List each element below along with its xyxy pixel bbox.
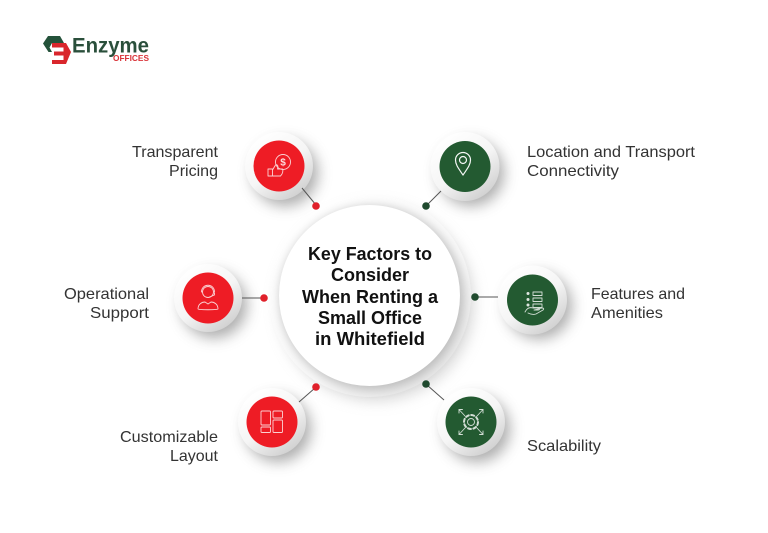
node: transparent pricing xyxy=(245,132,320,210)
icon: map pin xyxy=(456,152,470,175)
node: features and amenities xyxy=(471,266,572,339)
central heading xyxy=(302,244,439,349)
icon: support agent xyxy=(198,285,218,310)
label: scalability: Scalability xyxy=(527,438,601,455)
node: scalability xyxy=(422,380,510,462)
label: operational support: Operational xyxy=(64,286,149,303)
icon: layout grid xyxy=(261,411,282,432)
icon: dollar and thumbs up xyxy=(268,154,290,176)
label: features and amenities: Amenities xyxy=(591,305,663,322)
node: operational support xyxy=(174,264,268,338)
central heading: Small Office xyxy=(318,308,422,328)
logo subtitle: OFFICES xyxy=(113,53,149,63)
central heading: Consider xyxy=(331,265,409,285)
node: location xyxy=(422,132,504,210)
central heading: in Whitefield xyxy=(315,329,425,349)
label: transparent pricing: Pricing xyxy=(169,163,218,180)
central circle xyxy=(269,195,474,401)
label: features and amenities: Features and xyxy=(591,286,685,303)
label: location: Location and Transport xyxy=(527,144,696,161)
label: operational support: Support xyxy=(90,305,150,322)
logo wordmark: Enzyme xyxy=(72,34,149,58)
label: customizable layout: Customizable xyxy=(120,429,218,446)
central heading: When Renting a xyxy=(302,287,439,307)
logo mark xyxy=(43,36,71,64)
label: operational support xyxy=(64,286,150,322)
label: transparent pricing: Transparent xyxy=(132,144,219,161)
central heading: Key Factors to xyxy=(308,244,432,264)
node: transparent pricing: $ xyxy=(280,158,286,168)
label: location xyxy=(527,144,696,180)
label: features and amenities xyxy=(591,286,685,322)
label: customizable layout: Layout xyxy=(170,448,219,465)
icon: list on hand xyxy=(525,292,544,314)
label: customizable layout xyxy=(120,429,219,465)
icon: gear with arrows xyxy=(459,410,483,434)
node: customizable layout xyxy=(238,383,320,462)
logo xyxy=(43,34,149,64)
label: transparent pricing xyxy=(132,144,219,180)
label: location: Connectivity xyxy=(527,163,619,180)
